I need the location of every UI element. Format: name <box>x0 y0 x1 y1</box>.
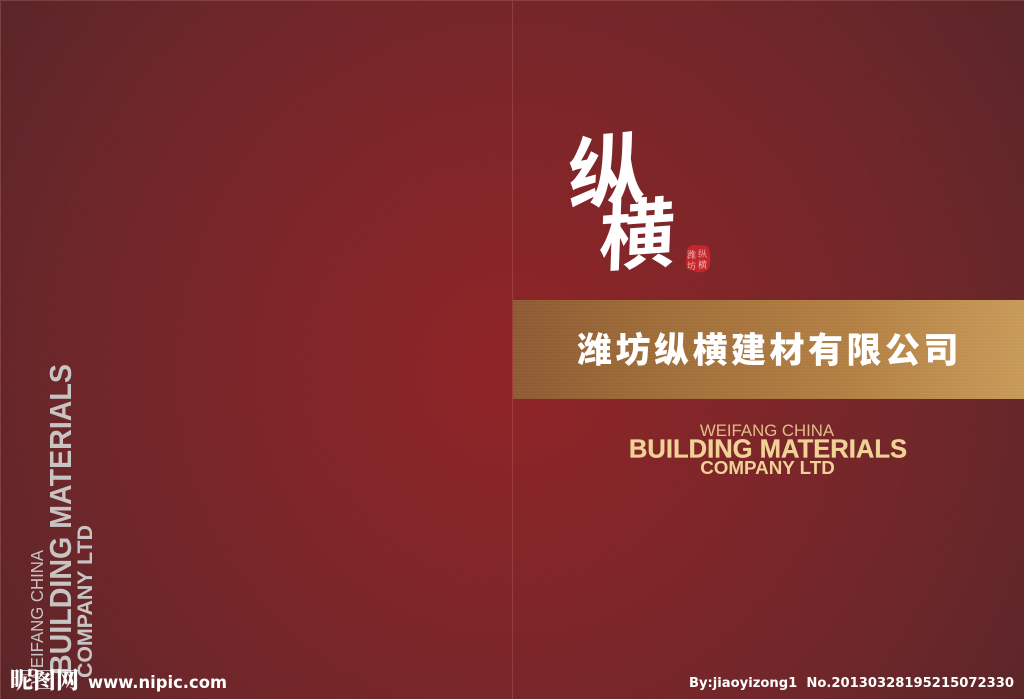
heading: Chinese company name: 潍坊纵横建材有限公司 <box>577 330 962 370</box>
text block: English company name: WEIFANG CHINA <box>700 421 835 440</box>
panel: back cover vertical company name: BUILDING MATERIALS <box>44 364 78 675</box>
icon: red seal: 坊 <box>687 259 696 272</box>
panel: back cover vertical company name: COMPANY LTD <box>74 525 97 678</box>
icon: calligraphy logo <box>568 125 676 282</box>
text block: English company name: COMPANY LTD <box>700 457 835 478</box>
panel: back cover vertical company name: WEIFANG CHINA <box>27 550 47 684</box>
icon: red seal <box>686 245 710 272</box>
watermark: site name <box>10 662 227 695</box>
watermark: site name: www.nipic.com <box>88 673 227 693</box>
watermark: site name: 昵图网 <box>10 662 79 695</box>
icon: red seal: 横 <box>698 258 707 271</box>
icon: red seal: 潍 <box>687 248 696 261</box>
panel: gold band <box>513 300 1024 399</box>
watermark: author and number: By:jiaoyizong1 No.20130328195215072330 <box>689 676 1014 691</box>
icon: calligraphy logo: 横 <box>597 192 676 282</box>
text block: English company name: BUILDING MATERIALS <box>629 436 907 464</box>
text block: English company name <box>629 421 907 478</box>
icon: red seal: 纵 <box>698 247 707 260</box>
icon: calligraphy logo: 纵 <box>568 125 646 221</box>
panel: back cover vertical company name <box>27 364 97 684</box>
